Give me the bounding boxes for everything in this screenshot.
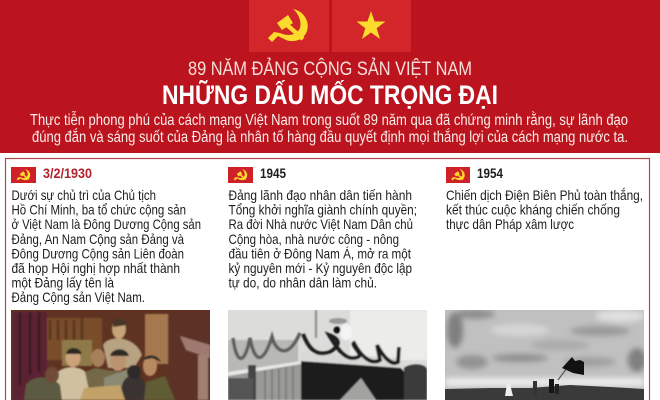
body text xyxy=(228,187,417,291)
body text: Đảng Cộng sản Việt Nam. xyxy=(12,289,145,305)
body text: một Đảng lấy tên là xyxy=(12,275,114,291)
panel: timeline frame xyxy=(6,158,650,400)
body text: Hồ Chí Minh, ba tổ chức cộng sản xyxy=(12,202,186,218)
icon: small party flag xyxy=(228,167,253,183)
intro text xyxy=(30,112,628,146)
body text xyxy=(446,187,643,232)
photo: founding conference painting xyxy=(11,310,210,400)
body text: Dưới sự chủ trì của Chủ tịch xyxy=(12,187,156,203)
header banner xyxy=(0,0,660,153)
photo: Ba Dinh platform xyxy=(228,310,427,400)
title: NHỮNG DẤU MỐC TRỌNG ĐẠI xyxy=(162,78,498,110)
icon: small party flag xyxy=(11,167,36,183)
body text: thực dân Pháp xâm lược xyxy=(446,216,574,232)
body text: đã họp Hội nghị hợp nhất thành xyxy=(12,260,180,276)
date: 3/2/1930 xyxy=(43,165,92,181)
body text: Tổng khởi nghĩa giành chính quyền; xyxy=(228,202,417,218)
body text: đầu tiên ở Đông Nam Á, mở ra một xyxy=(228,245,411,261)
body text: tự do, do nhân dân làm chủ. xyxy=(228,275,377,291)
photo: Dien Bien Phu victory flag xyxy=(445,309,646,400)
column: 3/2/1930 xyxy=(11,165,210,400)
body text: Đông Dương Cộng sản Liên đoàn xyxy=(12,245,184,261)
body text xyxy=(12,187,201,305)
column: 1945 xyxy=(228,165,427,400)
body text: Ra đời Nhà nước Việt Nam Dân chủ xyxy=(228,216,413,232)
subtitle: 89 NĂM ĐẢNG CỘNG SẢN VIỆT NAM xyxy=(188,57,472,80)
body text: kỷ nguyên mới - Kỷ nguyên độc lập xyxy=(228,260,412,276)
date: 1954 xyxy=(477,165,503,181)
body text: Đảng lãnh đạo nhân dân tiến hành xyxy=(228,187,412,203)
date: 1945 xyxy=(260,165,286,181)
body text: ở Việt Nam là Đông Dương Cộng sản xyxy=(12,216,201,232)
flag: hammer and sickle xyxy=(249,0,329,52)
column: 1954 xyxy=(445,165,646,400)
icon: small party flag xyxy=(446,167,470,183)
flag: gold star xyxy=(332,0,411,52)
body text: Cộng hòa, nhà nước công - nông xyxy=(228,231,399,247)
body text: kết thúc cuộc kháng chiến chống xyxy=(446,202,620,218)
body text: Đảng, An Nam Cộng sản Đảng và xyxy=(12,231,184,247)
